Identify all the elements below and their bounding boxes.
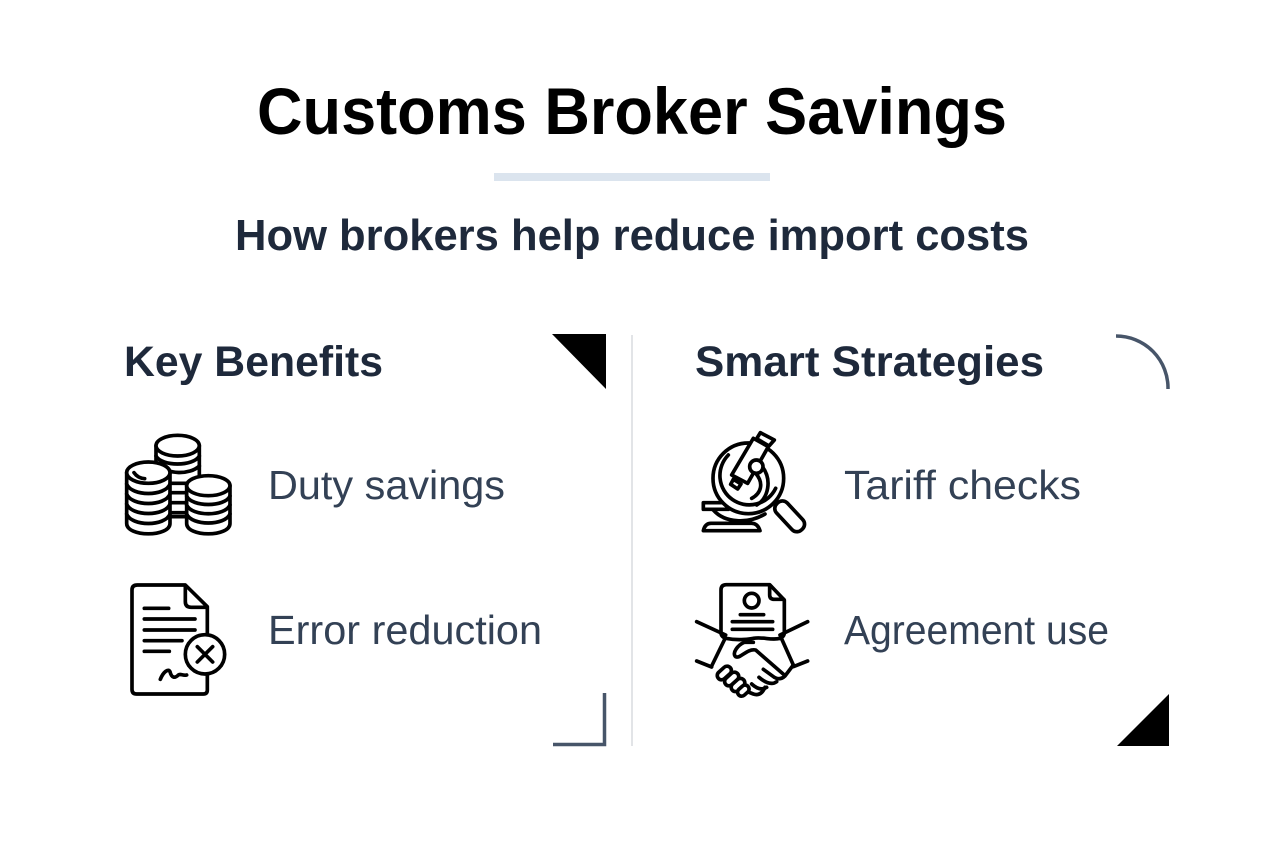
corner: black triangle bottom right (1117, 694, 1169, 746)
heading: smart strategies: Smart Strategies (695, 338, 1044, 386)
label: duty savings: Duty savings (268, 462, 505, 508)
title: Customs Broker Savings (257, 74, 1007, 148)
title underline (494, 173, 770, 181)
icon: document with error mark (132, 585, 225, 694)
subtitle: How brokers help reduce import costs (235, 211, 1029, 260)
corner: bracket bottom right (553, 693, 604, 744)
center divider (631, 335, 633, 746)
corner: quarter arc top right (1116, 336, 1168, 389)
icon: coin stacks (127, 435, 230, 534)
label: agreement use: Agreement use (844, 607, 1109, 653)
corner: black triangle top right (552, 334, 606, 389)
panel: key benefits (124, 334, 606, 744)
label: tariff checks: Tariff checks (844, 462, 1081, 508)
label: error reduction: Error reduction (268, 607, 542, 653)
icon detail: clasped fingers (715, 664, 751, 698)
icon: microscope and magnifier (703, 433, 807, 534)
heading: key benefits: Key Benefits (124, 338, 383, 386)
panel: smart strategies (695, 336, 1169, 746)
icon: agreement and handshake (697, 585, 808, 698)
